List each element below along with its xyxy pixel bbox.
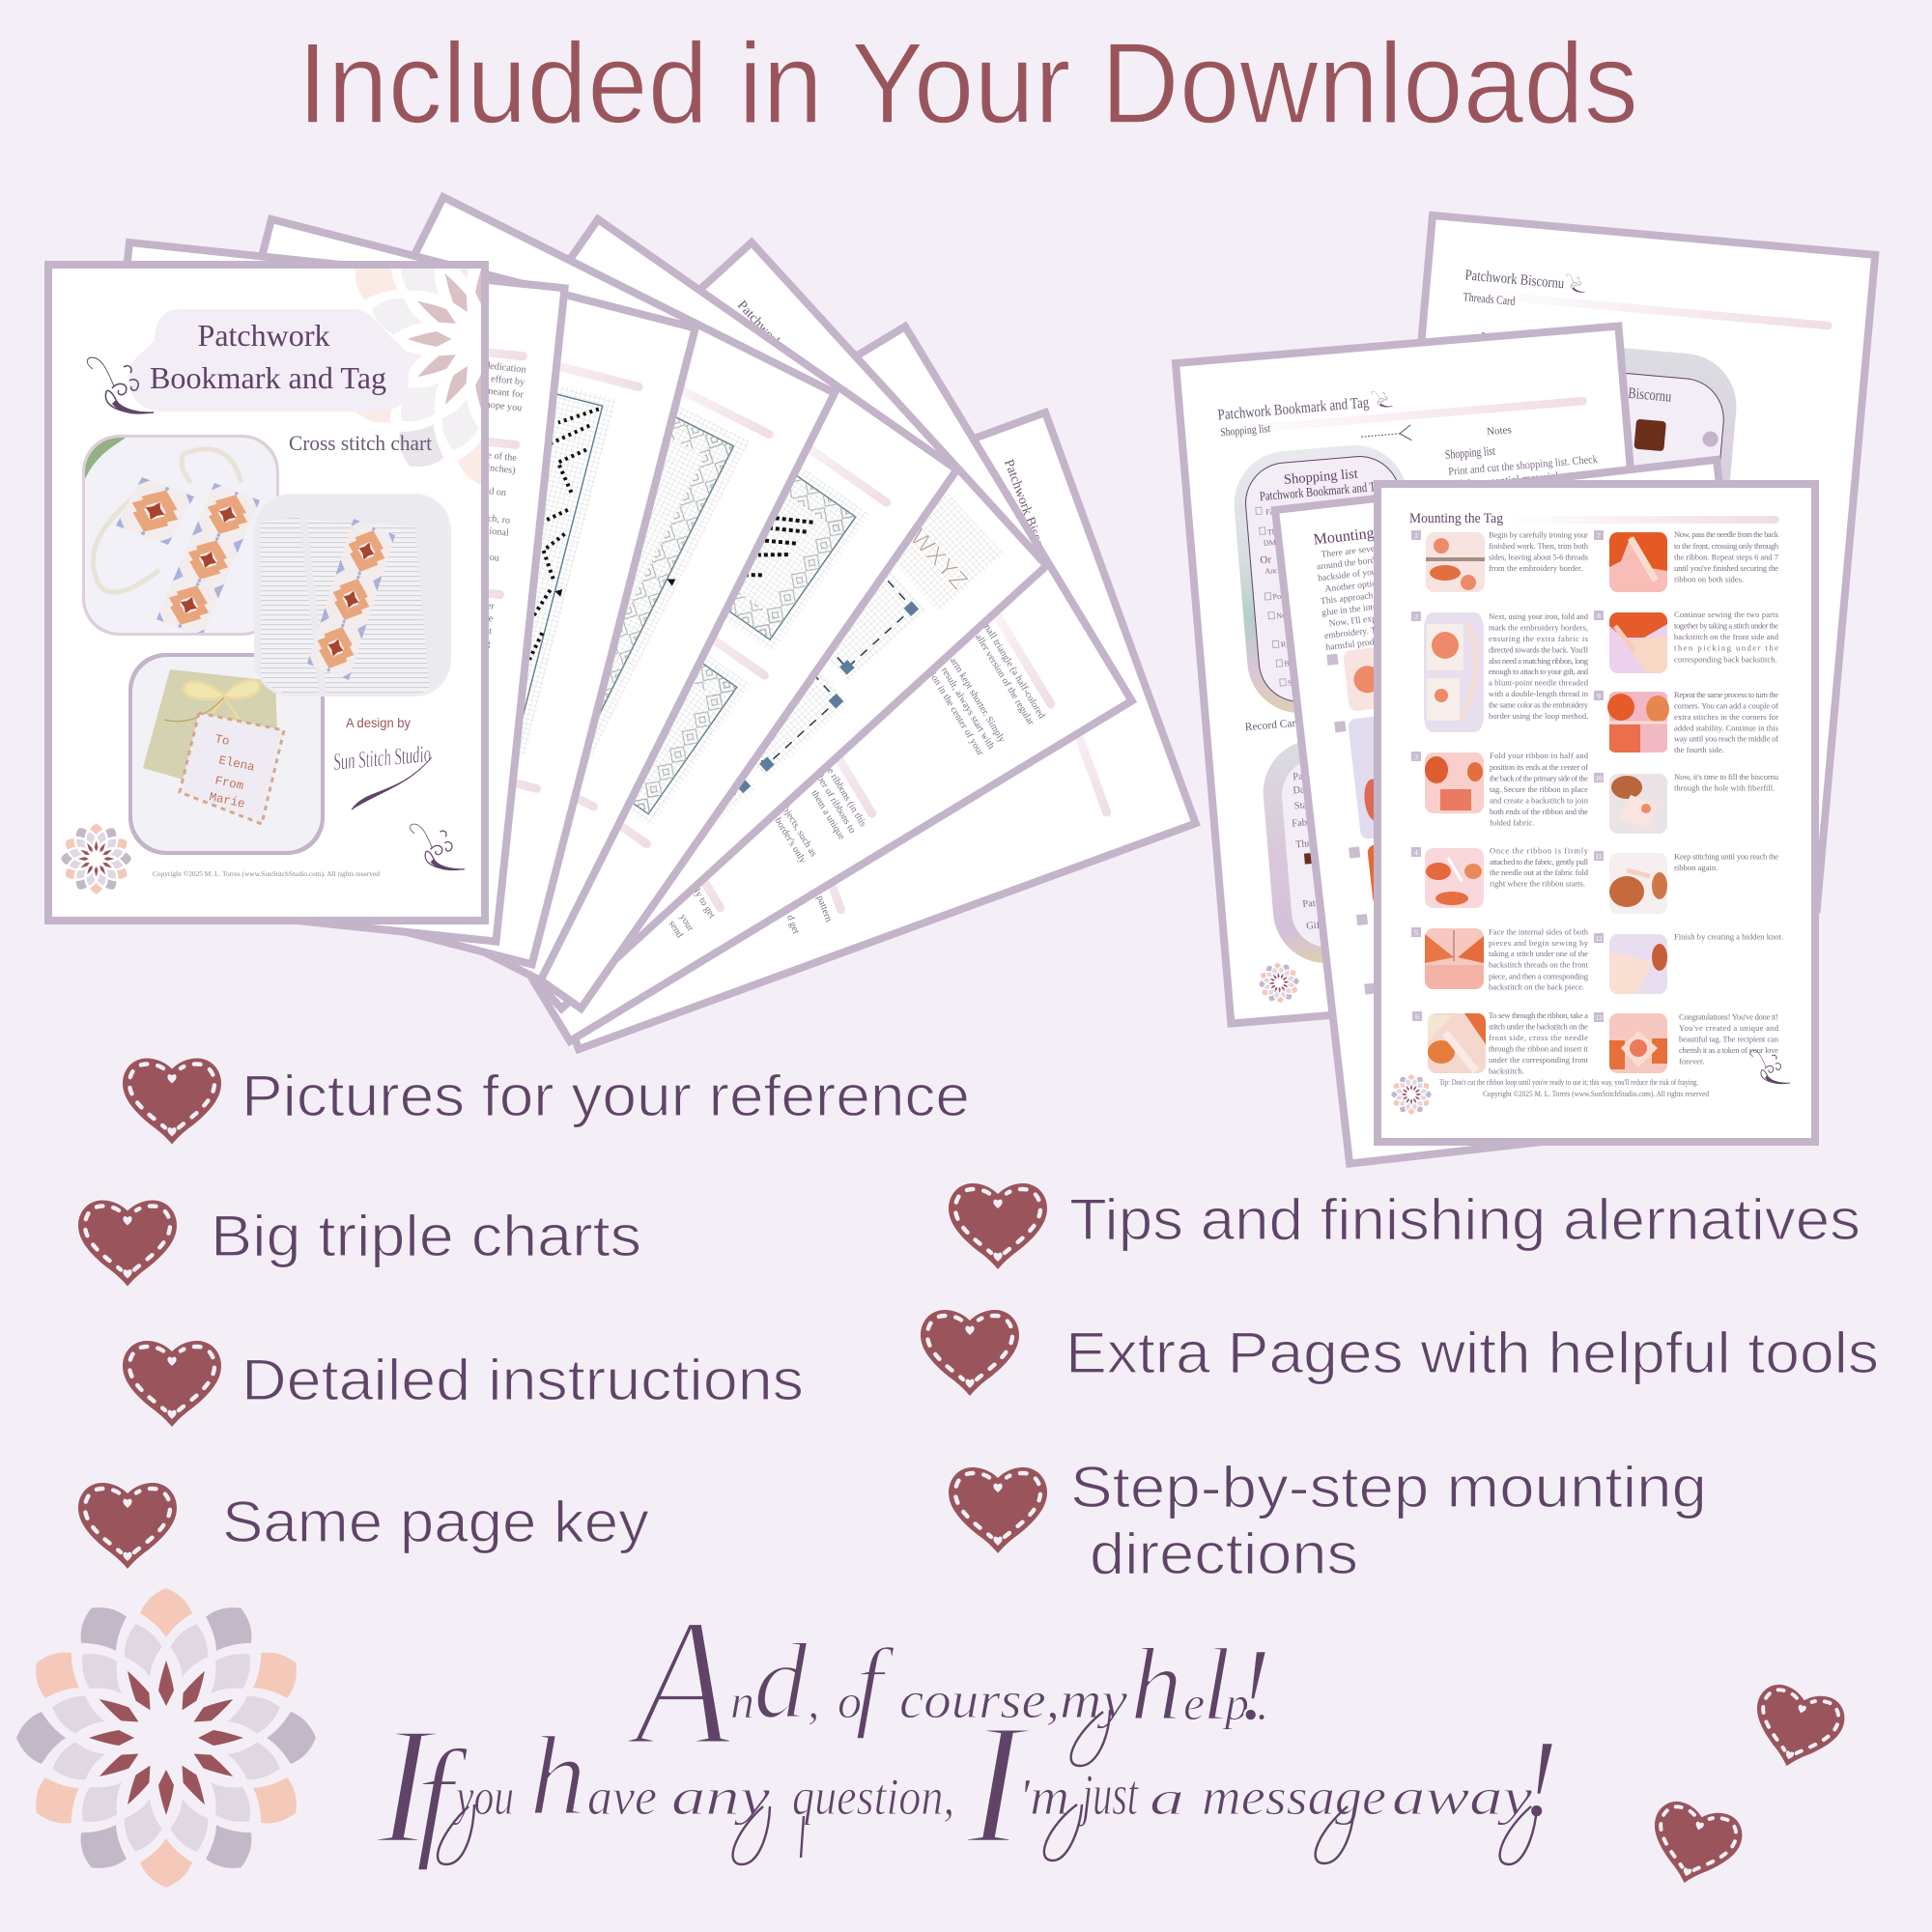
gift tag: Marie: [208, 790, 246, 811]
step 6: under the corresponding front: [1489, 1055, 1589, 1065]
sheet 2: long black chart: [108, 219, 696, 964]
step 1: [1411, 529, 1589, 592]
line one: l: [1202, 1628, 1231, 1743]
bullet: extra pages: [921, 1310, 1879, 1396]
step 7: [1594, 529, 1779, 592]
designer credit: A design by: [346, 716, 411, 730]
step 13: forever.: [1679, 1056, 1704, 1065]
step 4: 4: [1414, 848, 1418, 857]
sheet 7: d get: [784, 914, 801, 935]
page: Mounting the tag, front: [1378, 484, 1815, 1142]
step 6: To sew through the ribbon, take a: [1489, 1010, 1588, 1020]
step 12: 12: [1595, 934, 1603, 943]
bullet list: [78, 1059, 1879, 1586]
page: Patchwork Biscornu threads card: Threads Card: [1463, 290, 1517, 308]
step 3: 3: [1414, 753, 1418, 761]
sheet 1: intro text: size of the: [476, 449, 518, 464]
step 3: and create a backstitch to join: [1490, 795, 1589, 805]
page title: [1409, 511, 1779, 526]
sheet 1: intro text: ate: [477, 650, 490, 662]
line one: .: [1257, 1676, 1269, 1730]
step 9: the fourth side.: [1674, 745, 1724, 754]
cover title: Patchwork: [197, 318, 330, 353]
sheet 7: [428, 412, 1196, 1049]
sheet 3: long diamond chart: [150, 197, 835, 980]
sheet 6: ly to get: [692, 887, 717, 921]
page: Mounting the tag, back copy: around the border,: [1316, 554, 1384, 572]
step 8: 8: [1597, 611, 1601, 620]
step 11: 11: [1595, 852, 1603, 861]
shopping list card: Needles: [1276, 610, 1301, 620]
step 2: mark the embroidery borders,: [1489, 622, 1588, 632]
faded mandala on cover: [355, 269, 481, 485]
page: shopping list: [1176, 327, 1674, 1024]
right page stack: [1176, 215, 1875, 1164]
bullet: pictures: [123, 1059, 970, 1144]
step 5: pieces and begin sewing by: [1489, 938, 1589, 948]
icon: swirl ornament corner: [410, 824, 465, 870]
shopping list card: Patchwork Bookmark and Tag: [1259, 478, 1385, 503]
shopping list card: Sharp scissors: [1288, 675, 1332, 687]
step 9: 9: [1597, 692, 1601, 700]
bullet: instructions: Detailed instructions: [242, 1348, 804, 1412]
step 9: [1594, 690, 1779, 754]
step 2: Next, using your iron, fold and: [1489, 611, 1589, 621]
sheet 6: send: [667, 919, 685, 940]
page: Mounting the tag, back copy: backside of your work: [1318, 564, 1402, 583]
line one: f: [855, 1627, 895, 1740]
sheet 1: intro text: tional: [486, 526, 509, 539]
decorative heart upper: [1744, 1680, 1850, 1777]
tip and copyright: Copyright ©2025 M. L. Torres (www.SunStitchStudio.com). All rights reserved: [1483, 1089, 1710, 1098]
large mandala: [16, 1588, 316, 1888]
step 7: the ribbon. Repeat steps 6 and 7: [1674, 552, 1779, 561]
bullet: mounting: Step-by-step mounting: [1070, 1455, 1707, 1520]
line two: !: [1521, 1718, 1558, 1840]
shopping list card: Shopping list: [1283, 467, 1358, 488]
line two: away: [1392, 1768, 1532, 1826]
step 12: Finish by creating a hidden knot.: [1674, 931, 1783, 941]
bullet: tips: Tips and finishing alernatives: [1069, 1187, 1861, 1252]
step 6: [1412, 1010, 1589, 1075]
step 2: border using the loop method.: [1489, 711, 1588, 721]
bullet: pictures: Pictures for your reference: [242, 1064, 970, 1128]
step 13: Congratulations! You've done it!: [1679, 1011, 1778, 1021]
step 3: tag. Secure the ribbon in place: [1490, 784, 1588, 794]
designer credit: Sun Stitch Studio: [332, 741, 432, 776]
line one: my: [1060, 1671, 1127, 1729]
step 3: [1411, 751, 1589, 827]
sheet 6: them a unique: [809, 788, 847, 842]
step 13: cherish it as a token of your love: [1679, 1045, 1778, 1055]
icon: small mandala: [61, 824, 131, 894]
sheet 6: border's only: [772, 816, 809, 866]
line two: f: [415, 1722, 469, 1872]
line one: [626, 1581, 1271, 1784]
bullet: extra pages: Extra Pages with helpful tools: [1065, 1321, 1879, 1385]
step 13: [1594, 1011, 1779, 1073]
shopping list card: Polyester fiberfill: [1272, 588, 1328, 601]
sheet 6: the arm kept shorter. Simply: [940, 643, 1008, 746]
line one: p: [1222, 1676, 1249, 1730]
sheet 1: intro text: , you: [479, 552, 499, 564]
sheet 1: intro text: any effort by: [473, 372, 526, 388]
step 4: right where the ribbon starts.: [1490, 879, 1585, 889]
sheet 1: intro text: of dedication: [474, 359, 526, 376]
line two: I: [375, 1691, 440, 1879]
bullet: tips: [949, 1183, 1861, 1269]
cover subtitle: Cross stitch chart: [289, 431, 432, 455]
line one: ,: [808, 1674, 819, 1728]
page: shopping list: Shopping list: [1220, 421, 1271, 439]
bullet: key: Same page key: [222, 1490, 649, 1554]
gift tag: To: [213, 732, 231, 749]
sheet 1: intro text: ng: [480, 638, 491, 649]
line two: [375, 1688, 1558, 1880]
sheet 6: a small triangle (a half-colored: [975, 611, 1047, 721]
step 6: through the ribbon and insert it: [1489, 1043, 1589, 1053]
sheet 1: intro text: inches): [487, 463, 516, 476]
shopping list card: Fabric: Zweigart evenweave 25 count, in white: [1265, 496, 1411, 517]
bullet: charts: [78, 1200, 641, 1287]
shopping list card: Or: [1260, 554, 1272, 566]
page: shopping list: Print and cut the shopping list. Check: [1448, 454, 1599, 478]
sheet 1: intro text: uter: [478, 600, 496, 612]
step 5: Face the internal sides of both: [1489, 926, 1589, 936]
sheet 6: [343, 327, 1132, 1041]
page: Mounting the tag, back copy: This approach is: [1320, 589, 1382, 607]
step 5: piece, and then a corresponding: [1489, 972, 1589, 981]
shopping list card: DMC: [1264, 538, 1281, 548]
step 8: Continue sewing the two parts: [1674, 610, 1779, 619]
line two: just: [1077, 1763, 1139, 1827]
step 6: front side, cross the needle: [1489, 1033, 1588, 1042]
gift tag: From: [213, 774, 244, 793]
sheet 1: intro text: [61, 242, 565, 942]
step 9: corners. You can add a couple of: [1674, 701, 1778, 711]
step 7: Now, pass the needle from the back: [1674, 529, 1779, 539]
step 3: both ends of the ribbon and the: [1490, 807, 1588, 816]
page: Mounting the tag, back copy: Now, I'll explain: [1328, 611, 1391, 629]
page: shopping list: Record Card: [1244, 717, 1302, 733]
shopping list card: Anchor: [1264, 565, 1289, 576]
photo: bookmark in book: [254, 494, 451, 696]
sheet 1: intro text: meant for: [485, 385, 525, 401]
step 11: Keep stitching until you reach the: [1674, 852, 1778, 862]
step 10: through the hole with fiberfill.: [1674, 782, 1775, 792]
page title: Mounting the Tag: [1409, 511, 1503, 526]
bullet: instructions: [123, 1341, 804, 1427]
step 6: backstitch.: [1489, 1065, 1524, 1075]
icon: small mandala: [1391, 1074, 1432, 1115]
bullet: key: [78, 1483, 649, 1569]
icon: swirl ornament: [1750, 1050, 1790, 1084]
shopping list card: Threads:: [1267, 526, 1294, 537]
shopping list card: Ribbon: [1280, 639, 1304, 649]
photo: bookmark and tag: [82, 435, 279, 637]
step 13: 13: [1595, 1013, 1603, 1022]
step 8: then picking under the: [1674, 642, 1778, 652]
sheet 1: intro text: hope you: [485, 400, 523, 413]
page: Mounting the tag, back copy: Mounting the Tag: [1313, 520, 1424, 549]
cover title: Bookmark and Tag: [150, 360, 386, 395]
bullet: mounting: directions: [1090, 1521, 1358, 1586]
sheet 5: alphabet and dashed charts: UVWXYZ: [881, 498, 973, 595]
bullet: mounting: [949, 1455, 1707, 1586]
step 5: [1411, 926, 1589, 992]
sheet 1: intro text: the: [480, 612, 494, 624]
step 3: folded fabric.: [1490, 817, 1534, 827]
step 2: with a double-length thread in: [1489, 689, 1589, 698]
copyright: Copyright ©2025 M. L. Torres (www.SunStitchStudio.com). All rights reserved: [153, 869, 380, 878]
page: Patchwork Biscornu threads card: Biscornu: [1628, 385, 1672, 406]
page: Mounting the tag, back copy: harmful products: [1325, 636, 1390, 653]
line two: you: [452, 1768, 514, 1826]
line one: n: [730, 1674, 754, 1728]
step 10: Now, it's time to fill the biscornu: [1674, 772, 1779, 781]
line two: 'm: [1018, 1768, 1069, 1826]
gift tag: Elena: [217, 753, 256, 775]
step 6: stitch under the backstitch on the: [1489, 1022, 1588, 1032]
line one: A: [626, 1581, 732, 1784]
sheet 1: intro text: e: [481, 676, 488, 687]
step 6: 6: [1415, 1012, 1419, 1021]
step 7: to the front, crossing only through: [1674, 541, 1779, 551]
step 2: directed towards the back. You'll: [1489, 644, 1589, 654]
line two: message: [1202, 1768, 1386, 1826]
sheet 1: intro text: ch, ro: [487, 513, 511, 526]
record card: Started: [1293, 799, 1324, 811]
step 8: backstitch on the front side and: [1674, 632, 1779, 641]
step 2: [1411, 611, 1589, 732]
step 3: position its ends at the center of: [1490, 762, 1588, 772]
record card: Patchwork: [1293, 769, 1337, 782]
sheet 6: smaller version of the regular: [967, 622, 1037, 727]
sheet 6: tidy result, always start with: [929, 650, 996, 752]
step 3: Fold your ribbon in half and: [1490, 751, 1589, 760]
page: shopping list: Patchwork Bookmark and Tag: [1217, 394, 1370, 424]
step 10: 10: [1595, 774, 1603, 782]
step 1: sides, leaving about 5-6 threads: [1489, 552, 1589, 561]
step 11: ribbon again.: [1674, 863, 1718, 872]
step 11: [1594, 851, 1778, 914]
cover title: [128, 309, 409, 412]
step 5: backstitch threads on the front: [1489, 960, 1589, 970]
page: Mounting the tag, back copy: There are several ways: [1321, 540, 1406, 560]
line one: h: [1130, 1628, 1182, 1743]
step 1: Begin by carefully ironing your: [1489, 529, 1588, 539]
line one: e: [1183, 1676, 1205, 1730]
step 2: the same color as the embroidery: [1489, 700, 1589, 710]
sheet 5: alphabet and dashed charts: Patchwork Biscornu: [734, 298, 819, 389]
step 2: ensuring the extra fabric is: [1489, 634, 1589, 643]
step 4: Once the ribbon is firmly: [1490, 845, 1589, 855]
page: Mounting the tag, back copy: embroidery. This: [1323, 624, 1388, 641]
line two: ave: [587, 1768, 657, 1826]
icon: small mandala: [1257, 961, 1301, 1005]
step 2: enough to attach to your gift, and: [1489, 667, 1589, 676]
record card: Pattern: [1302, 896, 1332, 910]
step 7: ribbon on both sides.: [1674, 574, 1744, 583]
step 7: until you've finished securing the: [1674, 563, 1778, 573]
step 4: the needle out at the fabric fold: [1490, 867, 1589, 877]
record card: Threads: [1295, 838, 1328, 850]
page: Patchwork Biscornu threads card: Patchwork Biscornu: [1464, 267, 1565, 292]
sheet 6: motion in the center of your: [920, 658, 986, 758]
step 8: corresponding back backstitch.: [1674, 654, 1777, 664]
line two: a: [1150, 1771, 1184, 1825]
shopping list card: Beads: [1284, 658, 1303, 668]
page: shopping list: Shopping list: [1444, 443, 1496, 462]
step 9: Repeat the same process to turn the: [1674, 690, 1778, 699]
decorative heart lower: [1641, 1797, 1747, 1894]
step 4: [1411, 845, 1589, 908]
record card: [1259, 729, 1448, 967]
sheet 1: intro text: hat: [479, 625, 493, 637]
step 9: way until you reach the middle of: [1674, 734, 1778, 744]
script flourishes: [438, 1710, 1537, 1864]
closing message in script: [375, 1581, 1558, 1880]
step 12: [1594, 931, 1783, 994]
page: shopping list: Notes: [1487, 424, 1512, 438]
step 9: extra stitches in the corners for: [1674, 712, 1778, 722]
page fan: rotated sheets: [61, 197, 1196, 1049]
step 1: 1: [1414, 531, 1418, 540]
icon: swirl ornament: [87, 357, 154, 414]
step 8: together by taking a stitch under the: [1674, 620, 1778, 630]
line one: !: [1236, 1628, 1271, 1743]
page: Patchwork Biscornu threads card: [1375, 215, 1875, 909]
step 2: also need a matching ribbon, long: [1489, 656, 1589, 666]
step 7: 7: [1597, 531, 1601, 540]
step 5: 5: [1414, 928, 1418, 937]
sheet 6: the ribbons (in this: [821, 760, 868, 829]
sheet 4: two small charts: [222, 219, 957, 1009]
step 9: added stability. Continue in this: [1674, 723, 1779, 732]
tip and copyright: [1439, 1077, 1710, 1098]
step 13: beautiful tag. The recipient can: [1679, 1034, 1779, 1043]
designer credit: [332, 716, 432, 810]
sheet 5: alphabet and dashed charts: [267, 242, 1046, 1009]
shopping list card: [1230, 440, 1429, 718]
record card: Date: [1293, 784, 1313, 796]
line one: o: [838, 1674, 862, 1728]
page: shopping list: off the essential materials: [1449, 470, 1564, 492]
sheet 6: your: [677, 912, 696, 934]
step 3: the back of the primary side of the: [1490, 773, 1588, 782]
sheet 7: Patchwork Biscornu: [1001, 458, 1052, 566]
sheet 7: pattern: [814, 895, 834, 923]
sheet 6: mber of ribbons to: [810, 767, 858, 836]
page: Mounting the tag, back copy: glue in the interfacing: [1321, 599, 1404, 618]
step 13: You've created a unique and: [1679, 1023, 1779, 1033]
step 5: taking a stitch under one of the: [1489, 949, 1588, 958]
line one: course,: [899, 1671, 1060, 1729]
line two: question,: [792, 1768, 954, 1826]
gift tag: [180, 713, 284, 824]
step 10: [1594, 772, 1779, 834]
tip and copyright: Tip: Don't cut the ribbon loop until you're ready to use it; this way, you'll reduce the risk of fraying.: [1439, 1077, 1698, 1087]
step 2: 2: [1414, 612, 1418, 621]
step 5: backstitch on the back piece.: [1489, 982, 1584, 992]
step 2: a blunt-point needle threaded: [1489, 678, 1589, 688]
cover page: [44, 261, 489, 924]
sheet 6: objects, such as: [778, 801, 819, 859]
title: Included in Your Downloads: [298, 19, 1638, 148]
line two: I: [965, 1688, 1031, 1880]
bullet: charts: Big triple charts: [211, 1204, 641, 1268]
record card: Fabric: [1292, 816, 1319, 830]
line one: d: [753, 1622, 809, 1742]
photo: gift tag on box: [128, 653, 325, 855]
step 8: [1594, 610, 1779, 673]
sheet 1: intro text: ided on: [476, 485, 507, 498]
line two: any: [671, 1768, 770, 1826]
line two: h: [529, 1713, 586, 1839]
page: Mounting the tag, back copy: Another option is: [1324, 577, 1390, 595]
step 1: finished work. Then, trim both: [1489, 541, 1589, 551]
step 4: attached to the fabric, gently pull: [1490, 857, 1589, 867]
page: Mounting the tag, back copy: [1275, 460, 1791, 1164]
step 1: from the embroidery border.: [1489, 563, 1582, 573]
record card: Gifted to: [1306, 919, 1343, 932]
sheet 1: intro text: d: [479, 690, 486, 700]
